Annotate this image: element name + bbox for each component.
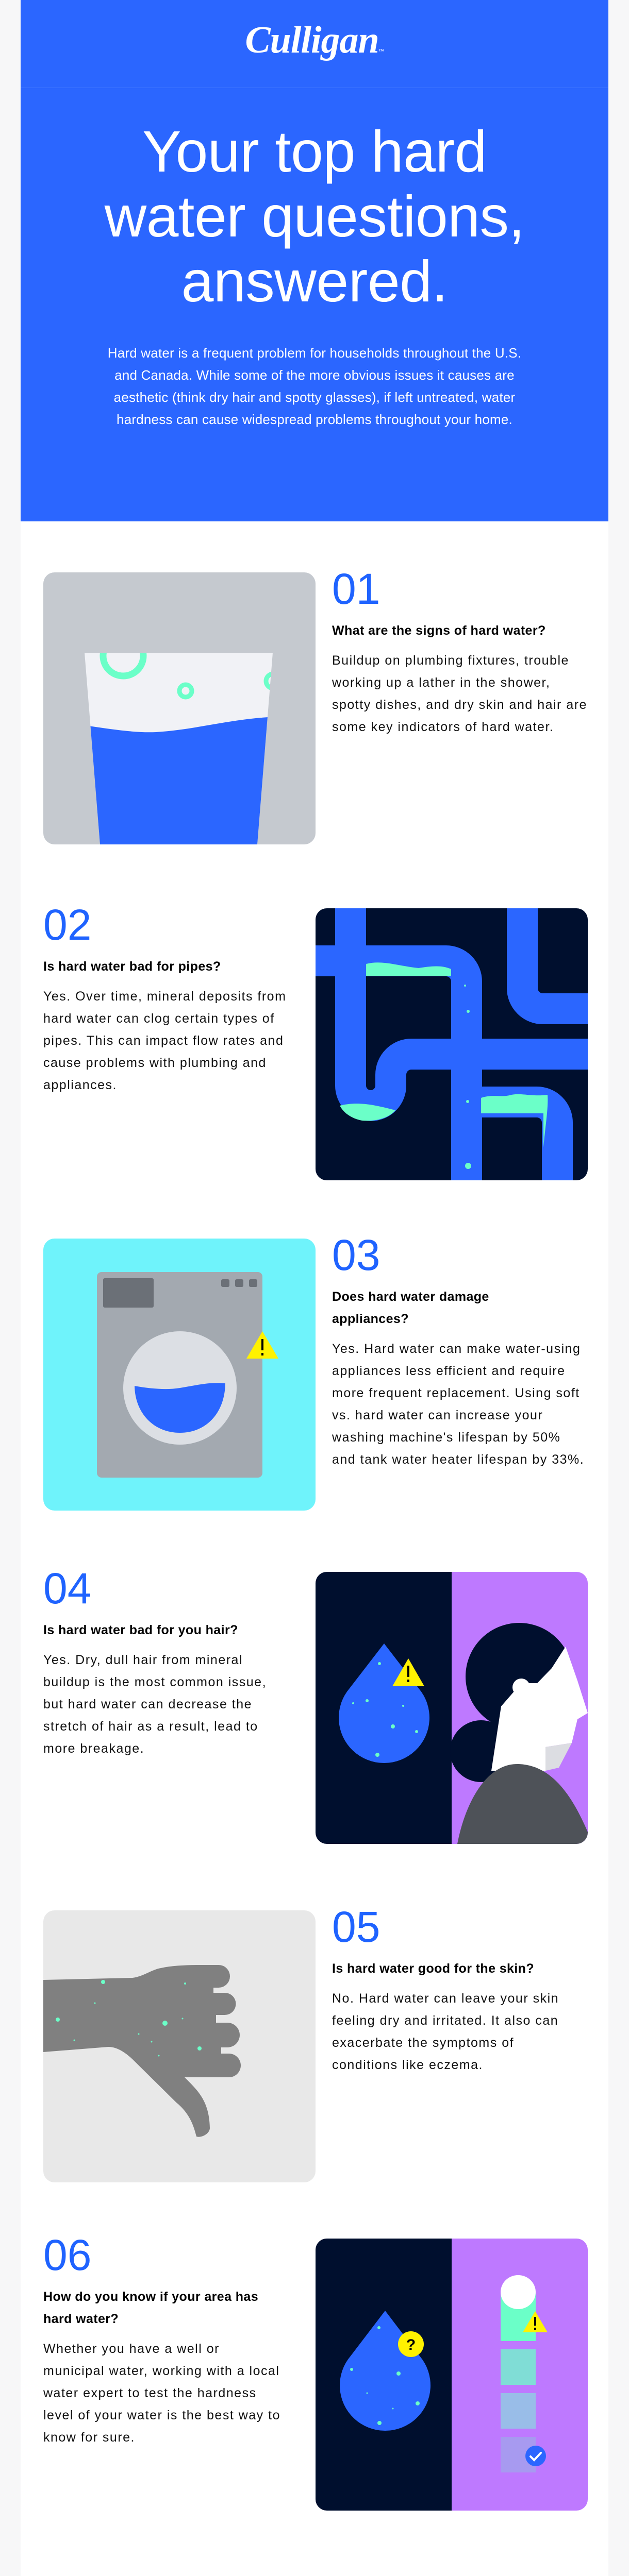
text 03: Does hard water damage [332,1290,489,1304]
text 03: vs. hard water can increase your [332,1408,543,1422]
text 01: working up a lather in the shower, [332,675,550,690]
text 05: feeling dry and irritated. It also can [332,2013,558,2028]
text 03: more frequent replacement. Using soft [332,1386,580,1400]
text 04: 04 [43,1564,91,1613]
text 03: appliances? [332,1312,409,1326]
title: answered. [181,249,448,314]
text 01: 01 [332,565,380,613]
text 04: Yes. Dry, dull hair from mineral [43,1653,243,1667]
text 06: hard water? [43,2312,119,2326]
text 06: know for sure. [43,2430,135,2445]
illustration 06: drop and test strip [316,2239,588,2511]
logo: Culligan: Culligan™ [245,19,384,61]
text 05: No. Hard water can leave your skin [332,1991,559,2006]
text 02: cause problems with plumbing and [43,1056,267,1070]
illustration 04: drop and woman profile [316,1572,588,1844]
text 01: What are the signs of hard water? [332,623,546,638]
text 03: Yes. Hard water can make water-using [332,1342,581,1356]
intro text: aesthetic (think dry hair and spotty glasses), if left untreated, water [114,389,515,405]
text 02: Yes. Over time, mineral deposits from [43,989,286,1004]
text 02 [43,901,286,1092]
text 04: stretch of hair as a result, lead to [43,1719,258,1734]
header banner [21,0,608,521]
text 05: conditions like eczema. [332,2058,483,2072]
intro text: Hard water is a frequent problem for households throughout the U.S. [108,345,521,361]
illustration 02: pipes [316,908,588,1180]
text 06 [43,2231,280,2445]
text 02: pipes. This can impact flow rates and [43,1033,284,1048]
text 02: appliances. [43,1078,117,1092]
icon: warning triangle [246,1331,278,1359]
text 04: more breakage. [43,1741,144,1756]
text 03: appliances less efficient and require [332,1364,566,1378]
intro text [108,345,521,427]
text 05: 05 [332,1903,380,1951]
text 03 [332,1231,584,1467]
illustration 05: thumbs-down hand [43,1910,316,2182]
title [104,119,524,314]
intro text: and Canada. While some of the more obvious issues it causes are [114,367,515,383]
text 04: Is hard water bad for you hair? [43,1623,238,1637]
text 02: hard water can clog certain types of [43,1011,275,1026]
text 05: exacerbate the symptoms of [332,2036,514,2050]
text 06: level of your water is the best way to [43,2408,280,2422]
text 01 [332,565,587,734]
text 01: spotty dishes, and dry skin and hair are [332,698,587,712]
text 04: buildup is the most common issue, [43,1675,267,1689]
text 04: but hard water can decrease the [43,1697,252,1711]
text 02: 02 [43,901,91,949]
intro text: hardness can cause widespread problems throughout your home. [117,412,512,427]
text 05: Is hard water good for the skin? [332,1961,534,1976]
text 01: Buildup on plumbing fixtures, trouble [332,653,569,668]
text 04 [43,1564,267,1756]
text 06: water expert to test the hardness [43,2386,257,2400]
text 03: washing machine's lifespan by 50% [332,1430,560,1445]
text 03: and tank water heater lifespan by 33%. [332,1452,584,1467]
text 03: 03 [332,1231,380,1279]
illustration 03: washing machine [43,1239,316,1511]
title: water questions, [105,184,524,249]
text 05 [332,1903,559,2072]
icon: question circle: ? [406,2336,416,2353]
icon: question circle [398,2331,424,2357]
text 06: Whether you have a well or [43,2342,220,2356]
text 06: 06 [43,2231,91,2279]
text 01: some key indicators of hard water. [332,720,554,734]
text 06: municipal water, working with a local [43,2364,279,2378]
title: Your top hard [142,119,487,184]
text 02: Is hard water bad for pipes? [43,959,221,974]
illustration 01: glass of water [43,572,316,844]
text 06: How do you know if your area has [43,2290,258,2304]
